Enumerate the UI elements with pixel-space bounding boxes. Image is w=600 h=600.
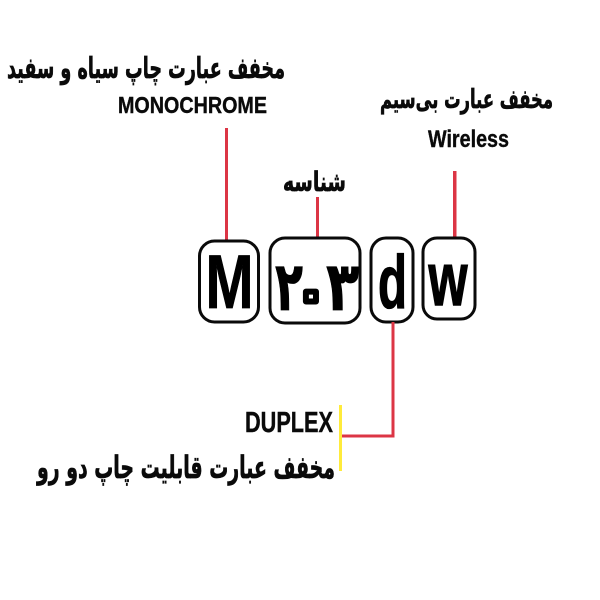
- connector: identifier: [316, 197, 319, 237]
- letter: d: d: [378, 240, 407, 324]
- digit: 3: ۳: [326, 248, 359, 327]
- connector: M: [225, 128, 228, 240]
- connector: d to duplex: [341, 322, 393, 436]
- heading: monochrome Persian: مخفف عبارت چاپ سیاه و سفید: [7, 51, 285, 86]
- box: d: [371, 238, 413, 324]
- heading: identifier: شناسه: [283, 167, 346, 198]
- heading: Wireless: Wireless: [428, 126, 509, 153]
- heading: duplex Persian: مخفف عبارت قابلیت چاپ دو رو: [36, 450, 335, 486]
- heading: DUPLEX: DUPLEX: [245, 407, 333, 439]
- connector: w: [453, 171, 456, 237]
- letter: w: w: [428, 237, 468, 321]
- yellow divider: [339, 405, 342, 471]
- digit: 0: ۰: [293, 259, 329, 327]
- letter: M: M: [206, 240, 254, 325]
- digit: 2: ۲: [275, 248, 303, 327]
- box: M: [200, 240, 258, 325]
- digits: 203: [275, 248, 359, 327]
- box: 203: [270, 238, 360, 327]
- box: w: [423, 237, 475, 321]
- heading: MONOCHROME: MONOCHROME: [118, 92, 267, 118]
